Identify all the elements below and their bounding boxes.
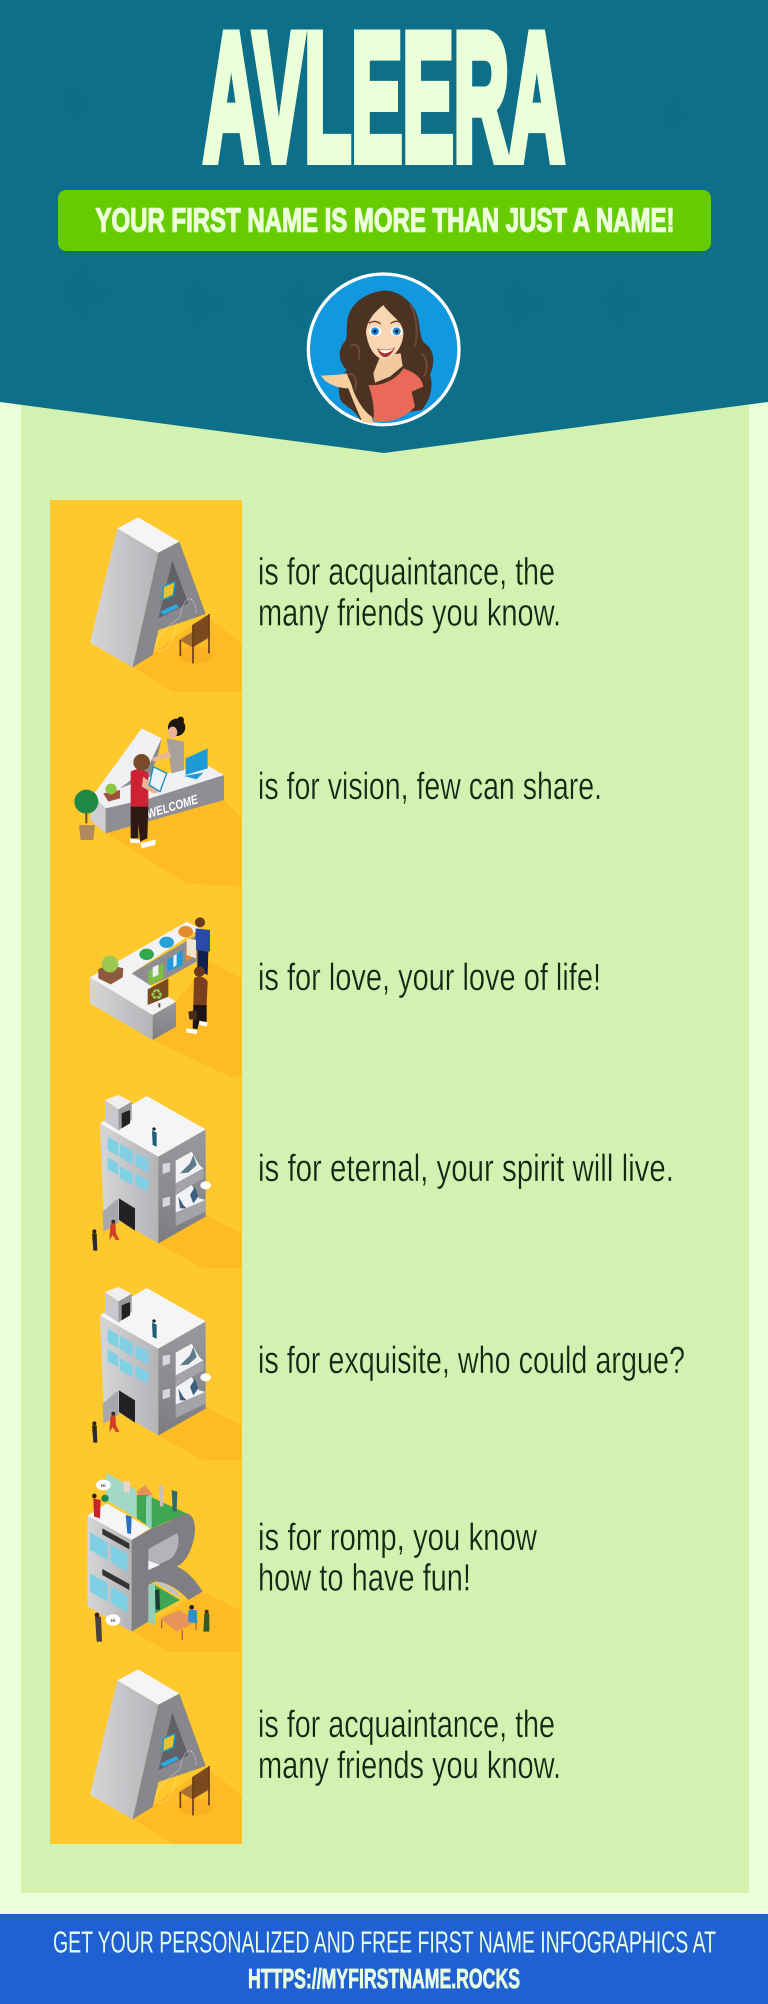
icon: final letter A <box>90 1669 242 1844</box>
text: A meaning: many friends you know. <box>258 593 561 635</box>
panel: letter illustrations column <box>50 500 242 1844</box>
icon: letter A with desk and chair <box>90 517 242 692</box>
panel: content background <box>21 395 749 1893</box>
icon: letter L recycling counter: ♻ <box>150 986 163 1003</box>
icon: letter V reception desk <box>74 717 242 887</box>
text: final A meaning: many friends you know. <box>258 1745 561 1787</box>
text: A meaning <box>258 551 561 635</box>
speech bubble: Hi: Hi <box>101 1483 106 1489</box>
icon: letter R building <box>88 1473 240 1652</box>
icon: second letter E building <box>92 1287 242 1460</box>
icon: letter V reception desk: WELCOME <box>145 792 200 821</box>
text: final A meaning: is for acquaintance, the <box>258 1704 555 1746</box>
text: R meaning: how to have fun! <box>258 1558 471 1600</box>
speech bubble: Hi <box>106 1614 120 1626</box>
text: A meaning: is for acquaintance, the <box>258 551 555 593</box>
speech bubble: Hi <box>96 1480 111 1490</box>
footer: HTTPS://MYFIRSTNAME.ROCKS <box>248 1963 520 1994</box>
speech bubble: Hi: Hi <box>110 1618 116 1624</box>
text: V meaning: is for vision, few can share. <box>258 766 602 808</box>
text: L meaning: is for love, your love of life! <box>258 957 601 999</box>
icon: letter L recycling counter <box>90 917 242 1077</box>
icon: letter E building <box>92 1095 242 1268</box>
footer <box>0 1914 768 2004</box>
portrait: woman in circle <box>308 274 459 425</box>
text: final A meaning <box>258 1704 561 1787</box>
text: R meaning <box>258 1517 537 1600</box>
subtitle banner <box>58 190 711 251</box>
text: R meaning: is for romp, you know <box>258 1517 537 1559</box>
header band <box>0 0 768 453</box>
